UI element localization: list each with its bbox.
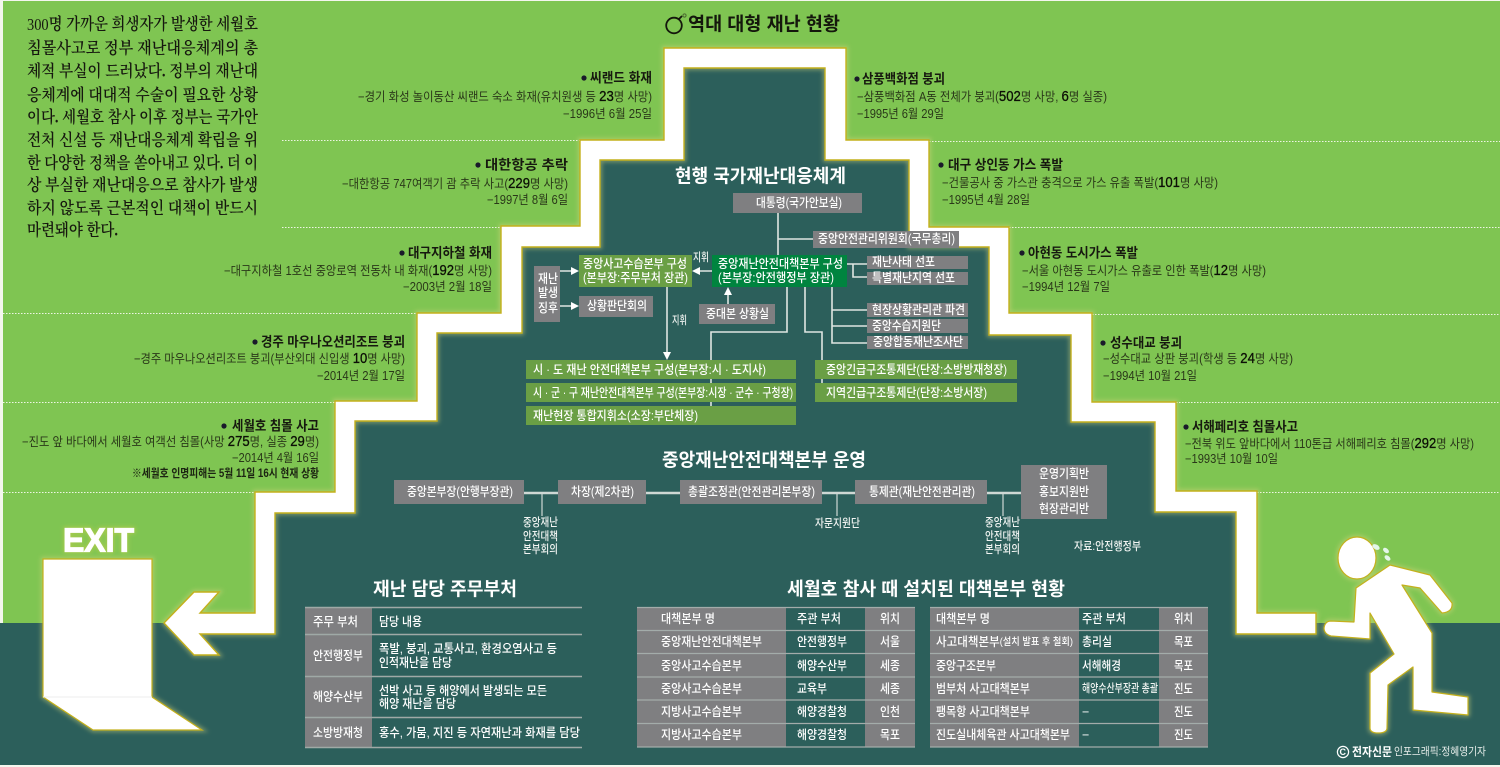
- event: 대한항공 추락: −대한항공 747여객기 괌 추락 사고(229명 사망): [342, 176, 568, 192]
- box: 중대본 상황실: 중대본 상황실: [706, 307, 769, 321]
- table: right: 팽목항 사고대책본부: [936, 704, 1030, 719]
- box: 차장: 차장(제2차관): [571, 485, 634, 499]
- label: 지휘: 지휘: [693, 250, 709, 264]
- event: 씨랜드 화재: 씨랜드 화재: [590, 70, 652, 86]
- event: 대구지하철 화재: [224, 246, 492, 294]
- event: 서해페리호 침몰사고: −1993년 10월 10일: [1185, 452, 1278, 466]
- event: 경주 마우나오션리조트 붕괴: 경주 마우나오션리조트 붕괴: [261, 334, 405, 350]
- table: ministries: 해양수산부: [313, 690, 363, 704]
- box: 지역긴급구조통제단: 지역긴급구조통제단(단장:소방서장): [826, 386, 987, 400]
- box: 대통령: 대통령(국가안보실): [756, 196, 842, 210]
- box: 운영기획반 홍보지원반 현장관리반: 현장관리반: [1039, 502, 1089, 516]
- table: ministries: 소방방재청: [313, 725, 363, 740]
- event: 세월호 침몰 사고: −진도 앞 바다에서 세월호 여객선 침몰(사망 275명, 실종 29명): [22, 434, 319, 450]
- box: 중앙사고수습본부: (본부장:주무부처 장관): [583, 271, 688, 285]
- EXIT sign text: EXIT: [63, 522, 134, 558]
- box: 대통령: [733, 193, 862, 213]
- event: 대구지하철 화재: −대구지하철 1호선 중앙로역 전동차 내 화재(192명 사망): [224, 263, 492, 279]
- label: 중앙재난안전대책본부회의: 중앙재난: [523, 516, 558, 529]
- table: right: 위치: [1174, 612, 1193, 626]
- table: left: 안전행정부: [797, 634, 847, 649]
- intro paragraph: 응체계에 대대적 수술이 필요한 상황: [27, 84, 258, 104]
- event: 대구지하철 화재: 대구지하철 화재: [408, 246, 492, 260]
- intro paragraph: 이다. 세월호 참사 이후 정부는 국가안: [27, 106, 258, 126]
- box: 시·도 재난 안전대책본부: 시 · 도 재난 안전대책본부 구성(본부장:시 · 도지사): [533, 362, 766, 377]
- credit: 인포그래픽:정혜영기자: [1394, 745, 1486, 758]
- event: 아현동 도시가스 폭발: −1994년 12월 7일: [1022, 280, 1110, 294]
- box: 재난 발생 징후: [534, 266, 560, 322]
- panel: 현행 국가재난대응체계 org chart: [526, 166, 1017, 425]
- table: left: 주관 부처: [797, 612, 841, 626]
- table: left: 중앙사고수습본부: [661, 659, 742, 673]
- dotted separators: [3, 140, 1500, 492]
- event: 대한항공 추락: −1997년 8월 6일: [487, 193, 568, 207]
- intro paragraph: 한 다양한 정책을 쏟아내고 있다. 더 이: [27, 152, 258, 172]
- white staircase evacuation path with exit arrow: [164, 48, 1316, 655]
- source note: 자료:안전행정부: [1074, 539, 1141, 553]
- table: ministries: 폭발, 붕괴, 교통사고, 환경오염사고 등: [379, 642, 557, 656]
- table: left: 해양경찰청: [797, 728, 847, 742]
- intro paragraph: 마련돼야 한다.: [27, 220, 118, 240]
- heading: 세월호 참사 때 설치된 대책본부 현황: 세월호 참사 때 설치된 대책본부 현황: [787, 578, 1065, 600]
- panel: 세월호 참사 때 설치된 대책본부 현황: [637, 578, 1208, 747]
- box: 중앙수습지원단: 중앙수습지원단: [872, 319, 941, 333]
- box: 중앙사고수습본부: [579, 255, 692, 287]
- box: 재난 발생 징후: 징후: [538, 301, 558, 315]
- event: 성수대교 붕괴: [1100, 336, 1293, 383]
- intro paragraph: 하지 않도록 근본적인 대책이 반드시: [27, 198, 258, 218]
- table: ministries: 선박 사고 등 해양에서 발생되는 모든: [379, 684, 547, 698]
- table: left: 인천: [880, 704, 900, 719]
- label: 자문지원단: 자문지원단: [815, 516, 860, 530]
- label: 중앙재난안전대책본부회의: 본부회의: [523, 543, 558, 556]
- box: 재난 발생 징후: 재난: [538, 271, 558, 286]
- intro paragraph: [27, 14, 258, 240]
- box: 재난사태 선포: 재난사태 선포: [872, 254, 935, 269]
- table: left: 위치: [880, 612, 900, 626]
- table: right: 사고대책본부(설치 발표 후 철회): [936, 634, 1073, 649]
- table: ministries: 주무 부처: [313, 615, 358, 629]
- event: 세월호 침몰 사고: −2014년 4월 16일: [232, 451, 319, 465]
- table: right: 목포: [1174, 635, 1193, 649]
- box: 재난사태 선포: [867, 254, 968, 269]
- event: 대구 상인동 가스 폭발: −1995년 4월 28일: [942, 193, 1030, 207]
- event: 삼풍백화점 붕괴: −삼풍백화점 A동 전체가 붕괴(502명 사망, 6명 실종): [857, 89, 1107, 105]
- icon: exit door with floor: [43, 559, 202, 730]
- table: left: 지방사고수습본부: [661, 728, 742, 742]
- credit: C: [1340, 747, 1346, 757]
- box: 재난 발생 징후: 발생: [538, 286, 558, 300]
- event: 삼풍백화점 붕괴: 삼풍백화점 붕괴: [862, 72, 945, 86]
- box: 재난현장 통합지휘소: [526, 406, 796, 425]
- table: right: 중앙구조본부: [936, 659, 996, 673]
- box: 운영기획반 홍보지원반 현장관리반: 홍보지원반: [1039, 484, 1089, 499]
- heading: 현행 국가재난대응체계: 현행 국가재난대응체계: [675, 166, 846, 186]
- credit: 전자신문: [1352, 745, 1392, 759]
- box: 중앙긴급구조통제단: 중앙긴급구조통제단(단장:소방방재청장): [826, 362, 1007, 377]
- panel: 중앙재난안전대책본부 운영: [394, 450, 1141, 556]
- heading: 재난 담당 주무부처: 재난 담당 주무부처: [373, 578, 517, 600]
- table: ministries: 홍수, 가뭄, 지진 등 자연재난과 화재를 담당: [379, 725, 580, 740]
- table: left: 목포: [880, 728, 900, 742]
- box: 재난현장 통합지휘소: 재난현장 통합지휘소(소장:부단체장): [533, 408, 698, 423]
- box: 통제관: 통제관(재난안전관리관): [869, 484, 975, 499]
- event: 씨랜드 화재: −경기 화성 놀이동산 씨랜드 숙소 화재(유치원생 등 23명 사망): [358, 89, 652, 105]
- label: 지휘: 지휘: [672, 313, 687, 327]
- event: 대구지하철 화재: −2003년 2월 18일: [403, 280, 492, 294]
- table: right: 서해해경: [1082, 659, 1121, 673]
- table: right: 총리실: [1082, 635, 1112, 649]
- label: 중앙재난안전대책본부회의: 안전대책: [985, 529, 1020, 543]
- event: 성수대교 붕괴: 성수대교 붕괴: [1110, 336, 1182, 350]
- event: 성수대교 붕괴: −성수대교 상판 붕괴(학생 등 24명 사망): [1103, 351, 1293, 367]
- event: 세월호 침몰 사고: 세월호 침몰 사고: [232, 418, 319, 434]
- table: left: 교육부: [797, 682, 827, 696]
- table: right: 진도실내체육관 사고대책본부: [936, 727, 1070, 742]
- box: 중앙긴급구조통제단: [815, 360, 1017, 379]
- table: right: 진도: [1174, 705, 1193, 719]
- event: 대한항공 추락: [342, 158, 569, 207]
- table: ministries: 담당 내용: [379, 615, 422, 629]
- intro paragraph: 상 부실한 재난대응으로 참사가 발생: [27, 174, 258, 194]
- label: 중앙재난안전대책본부회의: [985, 516, 1020, 556]
- event: 아현동 도시가스 폭발: 아현동 도시가스 폭발: [1028, 246, 1139, 260]
- table: left: 중앙사고수습본부: [661, 682, 742, 696]
- EXIT sign text: EXIT: [63, 522, 134, 558]
- event: 대구 상인동 가스 폭발: [938, 158, 1218, 207]
- icon: sweat drops: [1371, 543, 1392, 562]
- box: 차장: [558, 480, 646, 504]
- box: 중앙재난안전대책본부: 중앙재난안전대책본부 구성: [718, 256, 843, 271]
- box: 중앙안전관리위원회: 중앙안전관리위원회(국무총리): [818, 232, 955, 246]
- table: right: −: [1082, 705, 1089, 719]
- box: 중앙본부장: 중앙본부장(안행부장관): [407, 484, 513, 499]
- box: 통제관: [855, 480, 987, 504]
- table: ministries: 인적재난을 담당: [379, 655, 452, 670]
- table: right: 주관 부처: [1082, 612, 1126, 626]
- event: 삼풍백화점 붕괴: −1995년 6월 29일: [857, 107, 944, 121]
- table: right: 해양수산부장관 총괄: [1082, 682, 1158, 695]
- intro paragraph: 체적 부실이 드러났다. 정부의 재난대: [27, 60, 258, 80]
- box: 시·군·구 재난안전대책본부: 시 · 군 · 구 재난안전대책본부 구성(본부장:시장 · 군수 · 구청장): [533, 385, 793, 400]
- panel: 재난 담당 주무부처: [305, 578, 582, 748]
- box: 중앙재난안전대책본부: (본부장:안전행정부 장관): [718, 270, 834, 285]
- table: right: 진도: [1174, 728, 1193, 742]
- intro paragraph: 침몰사고로 정부 재난대응체계의 총: [27, 38, 258, 58]
- event: 대한항공 추락: 대한항공 추락: [485, 158, 569, 172]
- label: 중앙재난안전대책본부회의: 본부회의: [985, 543, 1020, 556]
- event: 성수대교 붕괴: −1994년 10월 21일: [1103, 369, 1197, 383]
- icon: bomb: [666, 14, 686, 33]
- event: 세월호 침몰 사고: ※세월호 인명피해는 5월 11일 16시 현재 상황: [132, 466, 319, 480]
- table: left: 대책본부 명: [661, 611, 715, 626]
- table: left: 서울: [880, 635, 900, 649]
- event: 삼풍백화점 붕괴: [854, 72, 1107, 121]
- table: ministries: 안전행정부: [313, 648, 363, 663]
- label: 중앙재난안전대책본부회의: [523, 516, 558, 556]
- event: 대구 상인동 가스 폭발: 대구 상인동 가스 폭발: [948, 158, 1064, 172]
- box: 상황판단회의: [579, 296, 653, 317]
- event: 씨랜드 화재: −1996년 6월 25일: [563, 107, 652, 121]
- event: 경주 마우나오션리조트 붕괴: [134, 334, 405, 383]
- connector lines: [524, 493, 1021, 516]
- box: 운영기획반 홍보지원반 현장관리반: [1021, 465, 1107, 519]
- label: 중앙재난안전대책본부회의: 안전대책: [523, 529, 558, 543]
- box: 총괄조정관: [680, 480, 822, 504]
- box: 중대본 상황실: [699, 304, 775, 324]
- table: right: 목포: [1174, 659, 1193, 673]
- table: left: 세종: [880, 659, 900, 673]
- box: 지역긴급구조통제단: [815, 383, 1017, 402]
- heading: 중앙재난안전대책본부 운영: 중앙재난안전대책본부 운영: [662, 450, 866, 470]
- box: 중앙사고수습본부: 중앙사고수습본부 구성: [583, 257, 687, 271]
- intro paragraph: 전처 신설 등 재난대응체계 확립을 위: [27, 130, 258, 150]
- icon: running person: [1324, 537, 1468, 733]
- connector lines: [560, 213, 867, 406]
- table: right: [930, 607, 1208, 747]
- table: right: 대책본부 명: [936, 611, 990, 626]
- event: 서해페리호 침몰사고: [1183, 420, 1474, 466]
- box: 총괄조정관: 총괄조정관(안전관리본부장): [688, 485, 815, 499]
- table: left: 해양수산부: [797, 659, 847, 673]
- box: 특별재난지역 선포: 특별재난지역 선포: [872, 270, 955, 285]
- box: 중앙합동재난조사단: 중앙합동재난조사단: [873, 334, 963, 349]
- box: 중앙재난안전대책본부: [712, 255, 847, 287]
- event: 아현동 도시가스 폭발: −서울 아현동 도시가스 유출로 인한 폭발(12명 사망): [1022, 263, 1266, 279]
- event: 경주 마우나오션리조트 붕괴: −2014년 2월 17일: [317, 369, 405, 383]
- box: 운영기획반 홍보지원반 현장관리반: 운영기획반: [1039, 467, 1089, 481]
- table: left: 해양경찰청: [797, 705, 847, 719]
- label: 중앙재난안전대책본부회의: 중앙재난: [985, 516, 1020, 529]
- table: left: [637, 607, 915, 747]
- box: 시·군·구 재난안전대책본부: [526, 383, 796, 402]
- table: right: −: [1082, 728, 1089, 742]
- table: left: 중앙재난안전대책본부: [661, 634, 762, 649]
- event: 서해페리호 침몰사고: −전북 위도 앞바다에서 110톤급 서해페리호 침몰(292명 사망): [1185, 436, 1474, 452]
- box: 현장상황관리관 파견: 현장상황관리관 파견: [872, 303, 965, 317]
- table: left: 지방사고수습본부: [661, 705, 742, 719]
- table: left: 세종: [880, 682, 900, 696]
- event: 대구 상인동 가스 폭발: −건물공사 중 가스관 충격으로 가스 유출 폭발(101명 사망): [942, 175, 1218, 191]
- event: 아현동 도시가스 폭발: [1019, 246, 1266, 294]
- box: 상황판단회의: 상황판단회의: [587, 299, 647, 313]
- main title with bomb icon: 역대 대형 재난 현황: [688, 14, 840, 34]
- table: ministries: [305, 607, 582, 748]
- event: 씨랜드 화재: [358, 70, 652, 121]
- table: right: 범부처 사고대책본부: [936, 681, 1030, 696]
- credit: [1337, 745, 1486, 759]
- intro paragraph: 300명 가까운 희생자가 발생한 세월호: [27, 14, 258, 34]
- event: 경주 마우나오션리조트 붕괴: −경주 마우나오션리조트 붕괴(부산외대 신입생 10명 사망): [134, 351, 405, 367]
- table: ministries: 해양 재난을 담당: [379, 696, 456, 711]
- table: right: 진도: [1174, 682, 1193, 696]
- event: 세월호 침몰 사고: [22, 418, 319, 480]
- box: 중앙본부장: [394, 480, 524, 504]
- event: 서해페리호 침몰사고: 서해페리호 침몰사고: [1192, 420, 1298, 434]
